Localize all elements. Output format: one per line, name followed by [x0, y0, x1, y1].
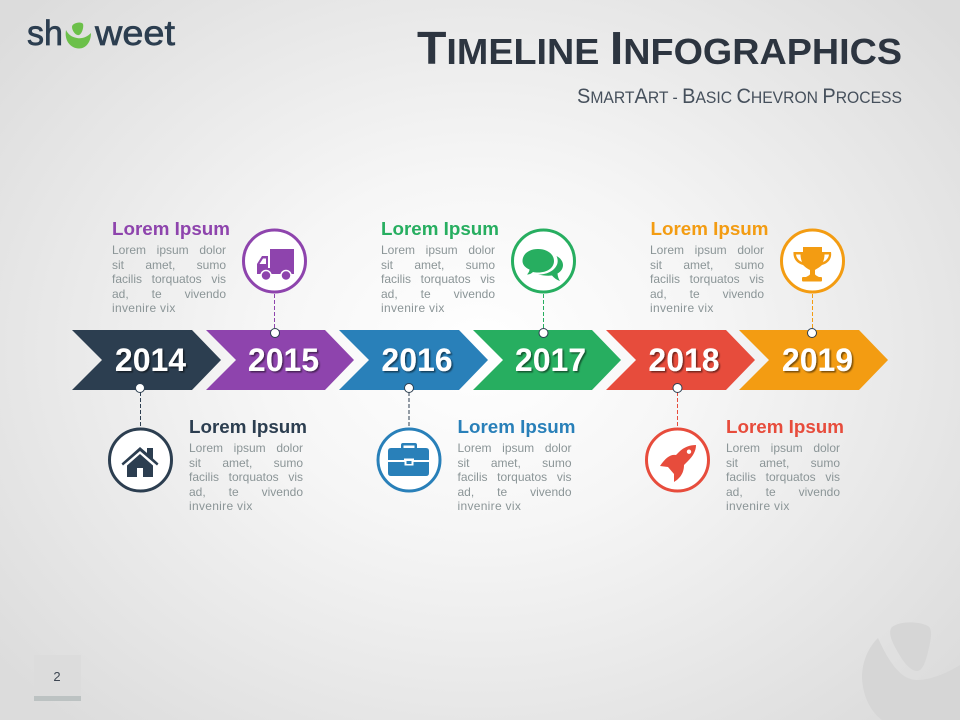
headings — [112, 218, 844, 437]
text block 2019: sit amet, sumo — [650, 258, 764, 272]
text block 2017: Lorem ipsum dolor — [381, 243, 495, 257]
marker 2019 trophy — [782, 230, 844, 338]
marker 2014 house — [110, 384, 172, 491]
text block 2016: sit amet, sumo — [458, 456, 572, 470]
chevron 2017 — [473, 330, 621, 390]
text block 2015: Lorem ipsum dolor — [112, 243, 226, 257]
text block 2018: invenire vix — [726, 499, 790, 513]
text block 2019: ad, te vivendo — [650, 286, 764, 300]
headings: Lorem Ipsum — [381, 218, 499, 239]
text block 2017: sit amet, sumo — [381, 258, 495, 272]
text block 2014: ad, te vivendo — [189, 484, 303, 498]
text block 2015: ad, te vivendo — [112, 286, 226, 300]
text block 2015: facilis torquatos vis — [112, 272, 226, 286]
chevron 2016: 2016 — [381, 342, 453, 378]
text block 2018: Lorem ipsum dolor — [726, 441, 840, 455]
logo: weet — [94, 14, 175, 53]
logo mark — [66, 23, 91, 48]
headings: Lorem Ipsum — [189, 416, 307, 437]
text block 2018: facilis torquatos vis — [726, 470, 840, 484]
chevron 2014: 2014 — [115, 342, 186, 378]
headings: Lorem Ipsum — [112, 218, 230, 239]
text block 2016: Lorem ipsum dolor — [458, 441, 572, 455]
text block 2015: sit amet, sumo — [112, 258, 226, 272]
headings: Lorem Ipsum — [650, 218, 768, 239]
icon: house — [122, 447, 158, 477]
marker 2016 briefcase — [378, 384, 440, 491]
marker 2017 chat — [512, 230, 574, 338]
chevron 2018: 2018 — [648, 342, 720, 378]
text block 2015: invenire vix — [112, 301, 176, 315]
text block 2014: sit amet, sumo — [189, 456, 303, 470]
chevron 2019 — [739, 330, 888, 390]
text block 2017: facilis torquatos vis — [381, 272, 495, 286]
text block 2018: sit amet, sumo — [726, 456, 840, 470]
chevron 2017: 2017 — [515, 342, 586, 378]
chevron 2014 — [72, 330, 221, 390]
icon: briefcase — [388, 443, 429, 476]
text block 2019: Lorem ipsum dolor — [650, 243, 764, 257]
chevron 2015 — [206, 330, 354, 390]
text block 2016 — [458, 441, 572, 513]
icon: truck — [257, 249, 294, 280]
logo — [27, 14, 175, 53]
text block 2015 — [112, 243, 226, 315]
chevron 2015: 2015 — [248, 342, 319, 378]
text block 2016: invenire vix — [458, 499, 521, 513]
text block 2018 — [726, 441, 840, 513]
logo: sh — [27, 14, 63, 53]
page number box: 2 — [53, 669, 61, 684]
text block 2017 — [381, 243, 495, 315]
text block 2014: facilis torquatos vis — [189, 470, 303, 484]
text block 2014: invenire vix — [189, 499, 253, 513]
chevron 2019: 2019 — [782, 342, 853, 378]
text block 2018: ad, te vivendo — [726, 484, 840, 498]
chevron 2016 — [339, 330, 488, 390]
headings: Lorem Ipsum — [726, 416, 844, 437]
text block 2014: Lorem ipsum dolor — [189, 441, 303, 455]
marker 2015 truck — [244, 230, 306, 338]
subtitle: SMARTART - BASIC CHEVRON PROCESS — [577, 85, 902, 108]
text block 2017: invenire vix — [381, 301, 445, 315]
icon: trophy — [793, 247, 831, 282]
text block 2019 — [650, 243, 764, 315]
page number box — [34, 655, 81, 701]
text block 2019: facilis torquatos vis — [650, 272, 764, 286]
watermark logo — [862, 622, 960, 720]
chevron 2018 — [606, 330, 755, 390]
text block 2019: invenire vix — [650, 301, 714, 315]
text block 2014 — [189, 441, 303, 513]
text block 2016: facilis torquatos vis — [458, 470, 572, 484]
icon: rocket — [660, 445, 696, 482]
marker 2018 rocket — [646, 384, 708, 491]
title: TIMELINE INFOGRAPHICS — [417, 22, 902, 74]
text block 2017: ad, te vivendo — [381, 286, 495, 300]
icon: chat bubbles — [522, 249, 563, 281]
headings: Lorem Ipsum — [458, 416, 576, 437]
text block 2016: ad, te vivendo — [458, 484, 572, 498]
